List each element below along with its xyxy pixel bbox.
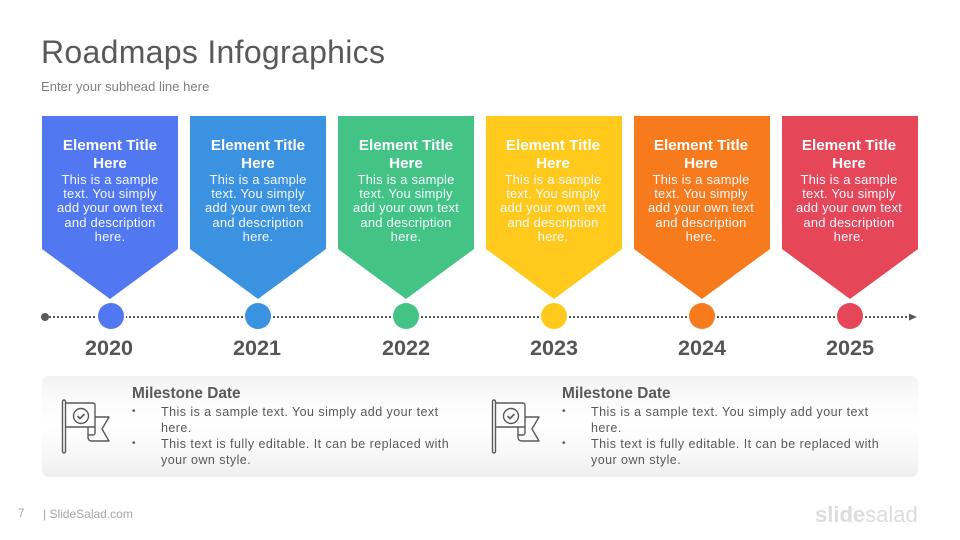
element 2022: Element Title: [359, 137, 453, 154]
milestone list right: This is a sample text. You simply add your text: [591, 405, 869, 419]
element 2020: here.: [95, 229, 125, 244]
element 2020: and description: [64, 215, 156, 230]
element 2025: Element Title: [802, 137, 896, 154]
milestone heading left: Milestone Date: [132, 385, 241, 402]
marker 2025: [836, 303, 862, 329]
element 2023: add your own text: [500, 200, 606, 215]
element 2024: add your own text: [648, 200, 754, 215]
milestone list left: •: [132, 438, 136, 449]
element 2020: text. You simply: [63, 186, 157, 201]
element 2025: add your own text: [796, 200, 902, 215]
marker 2021: [245, 303, 271, 329]
element 2023: This is a sample: [504, 172, 602, 187]
icon: flag left: [62, 399, 110, 454]
element 2021: [190, 116, 326, 299]
year 2024: 2024: [678, 335, 726, 360]
marker 2024: [688, 303, 714, 329]
timeline line: [41, 313, 917, 321]
milestone heading right: Milestone Date: [562, 385, 671, 402]
panel: milestones: [42, 376, 918, 477]
element 2024: and description: [655, 215, 747, 230]
element 2022: Here: [389, 155, 423, 172]
title: Roadmaps Infographics: [41, 34, 385, 70]
element 2025: here.: [834, 229, 864, 244]
milestone list left: [132, 405, 449, 467]
marker 2023: [540, 303, 566, 329]
icon: flag right: [492, 399, 540, 454]
element 2020: add your own text: [57, 200, 163, 215]
element 2021: text. You simply: [211, 186, 305, 201]
element 2024: here.: [686, 229, 716, 244]
element 2020: This is a sample: [61, 172, 159, 187]
footer text: | SlideSalad.com: [43, 507, 133, 521]
year 2023: 2023: [530, 335, 578, 360]
element 2022: and description: [360, 215, 452, 230]
element 2021: here.: [243, 229, 273, 244]
element 2020: Element Title: [63, 137, 157, 154]
milestone list left: This is a sample text. You simply add your text: [161, 405, 439, 419]
page number: 7: [18, 508, 24, 520]
element 2025: text. You simply: [802, 186, 896, 201]
element 2025: [782, 116, 918, 299]
year 2020: 2020: [85, 335, 133, 360]
element 2024: Element Title: [654, 137, 748, 154]
element 2023: and description: [507, 215, 599, 230]
element 2024: Here: [684, 155, 718, 172]
element 2021: This is a sample: [209, 172, 307, 187]
element 2024: text. You simply: [654, 186, 748, 201]
element 2022: [338, 116, 474, 299]
element 2020: [42, 116, 178, 299]
element 2022: This is a sample: [357, 172, 455, 187]
element 2021: Element Title: [211, 137, 305, 154]
element 2021: and description: [212, 215, 304, 230]
year 2021: 2021: [233, 335, 281, 360]
element 2021: add your own text: [205, 200, 311, 215]
marker 2022: [392, 303, 418, 329]
element 2025: This is a sample: [800, 172, 898, 187]
element 2023: Element Title: [506, 137, 600, 154]
milestone list right: [562, 405, 879, 467]
element 2023: here.: [538, 229, 568, 244]
element 2022: add your own text: [353, 200, 459, 215]
milestone list right: •: [562, 438, 566, 449]
element 2024: This is a sample: [652, 172, 750, 187]
element 2023: text. You simply: [506, 186, 600, 201]
subhead: Enter your subhead line here: [41, 79, 209, 94]
element 2021: Here: [241, 155, 275, 172]
element 2022: here.: [391, 229, 421, 244]
milestone list left: your own style.: [161, 453, 251, 467]
milestone list right: This text is fully editable. It can be replaced with: [591, 437, 879, 451]
element 2025: Here: [832, 155, 866, 172]
element 2024: [634, 116, 770, 299]
marker 2020: [98, 303, 124, 329]
element 2023: [486, 116, 622, 299]
milestone list left: •: [132, 406, 136, 417]
element 2020: Here: [93, 155, 127, 172]
milestone list right: •: [562, 406, 566, 417]
milestone list right: here.: [591, 421, 622, 435]
milestone list right: your own style.: [591, 453, 681, 467]
logo: slidesalad: [815, 502, 918, 527]
milestone list left: This text is fully editable. It can be replaced with: [161, 437, 449, 451]
milestone list left: here.: [161, 421, 192, 435]
element 2023: Here: [536, 155, 570, 172]
year 2022: 2022: [382, 335, 430, 360]
element 2022: text. You simply: [359, 186, 453, 201]
year 2025: 2025: [826, 335, 874, 360]
element 2025: and description: [803, 215, 895, 230]
